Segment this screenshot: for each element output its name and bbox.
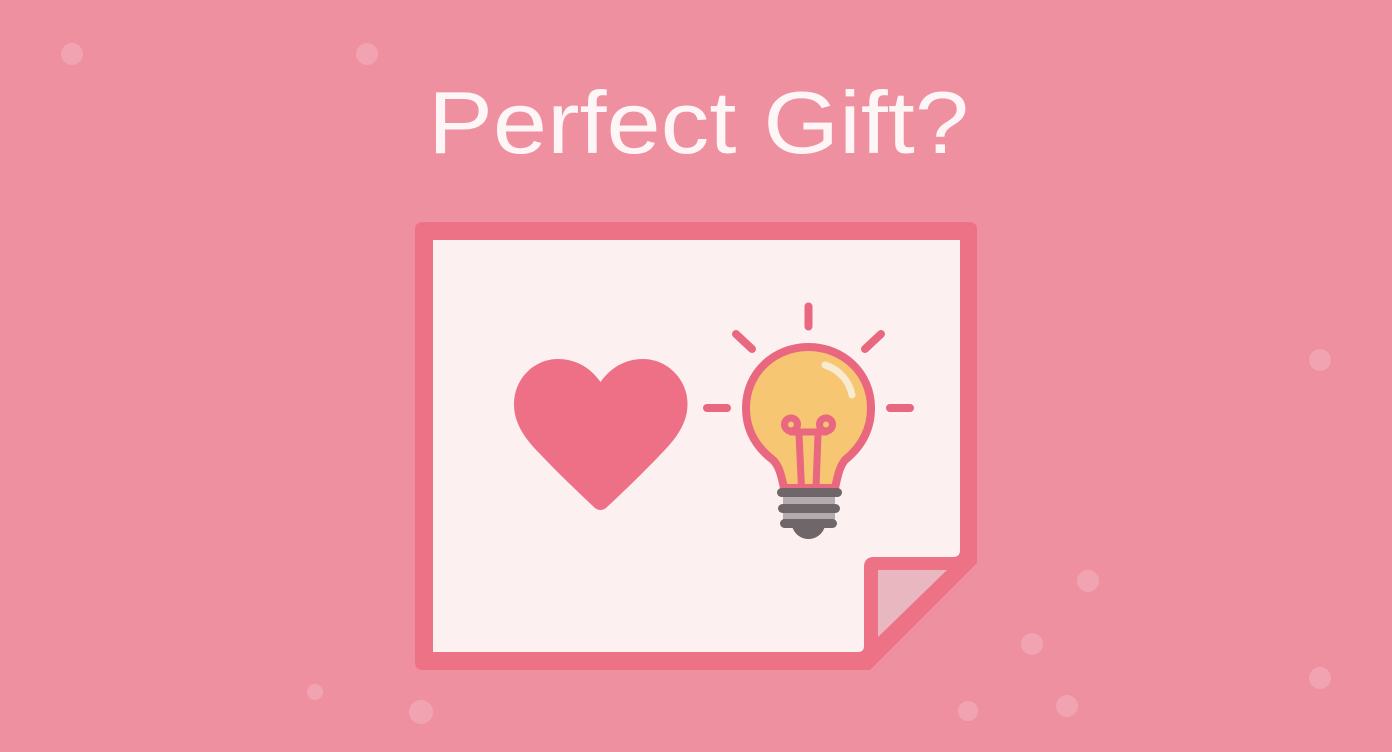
filament — [784, 418, 832, 488]
panel: sticky note — [415, 222, 977, 670]
title: Perfect Gift? — [428, 73, 969, 172]
bulb base — [777, 488, 842, 539]
icon: light bulb — [707, 306, 910, 539]
note paper — [433, 240, 960, 652]
note border — [415, 222, 977, 670]
icon: heart — [514, 359, 688, 510]
glass highlight — [825, 365, 852, 395]
folded corner — [878, 570, 947, 637]
bulb glass — [746, 347, 871, 488]
light rays — [707, 306, 910, 408]
